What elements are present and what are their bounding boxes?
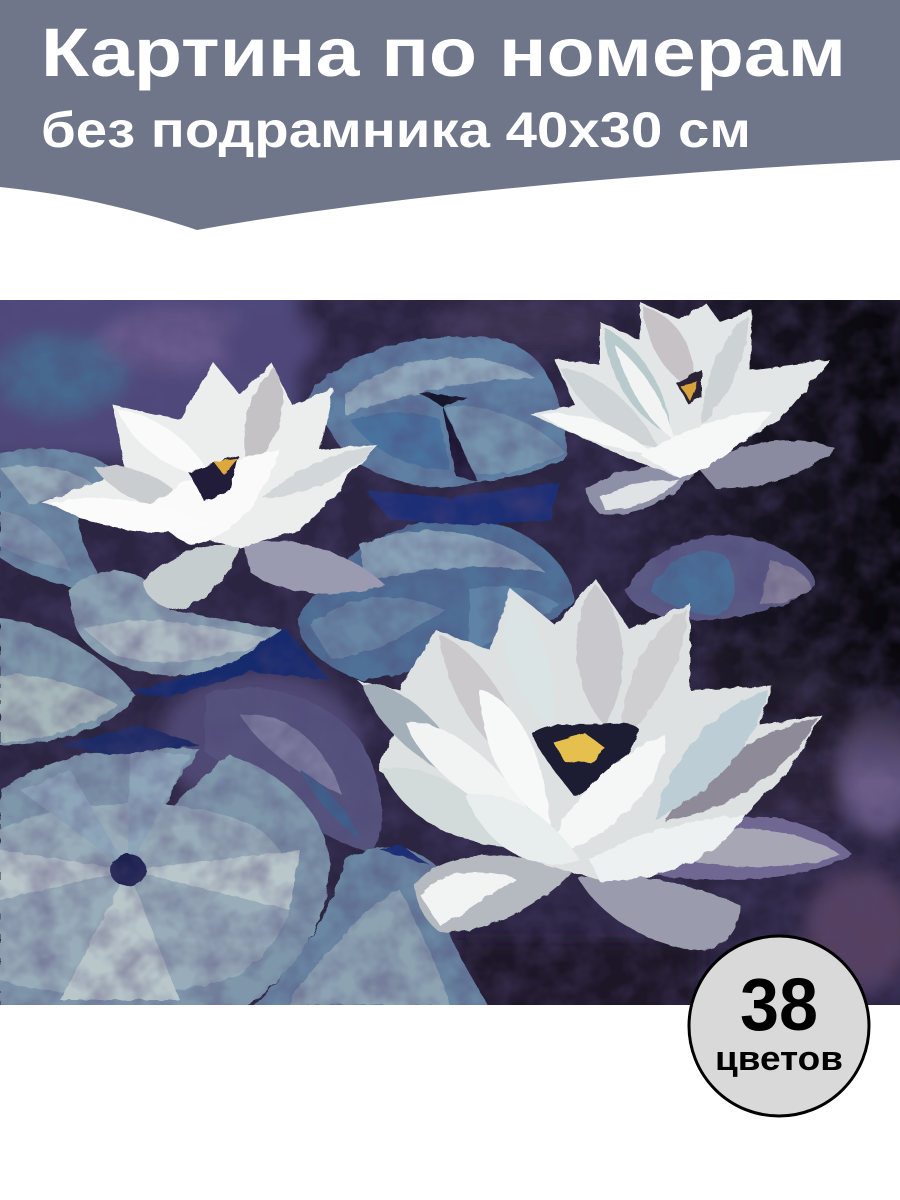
painting: water lilies: [0, 280, 900, 1030]
outer petals: [362, 684, 440, 769]
badge label: цветов: [715, 1040, 843, 1078]
pad: large bottom left: [0, 746, 330, 1010]
silhouette: [357, 578, 822, 880]
silhouette: [42, 362, 378, 548]
pad: left lower: [0, 618, 135, 745]
flower: top right: [530, 302, 835, 515]
background tones: [0, 280, 900, 1030]
mottled paint overlay: [0, 300, 900, 1005]
sepals: [243, 541, 385, 594]
pad: right dark: [625, 535, 815, 620]
sepals: [700, 440, 835, 488]
centre: [532, 723, 638, 797]
lily pads: [0, 336, 815, 1010]
subtitle: без подрамника 40х30 см: [41, 102, 751, 158]
centre: [676, 370, 702, 404]
centre: [188, 455, 238, 502]
pad: middle: [298, 518, 574, 680]
title: Картина по номерам: [41, 14, 846, 91]
dark right edge: [636, 300, 900, 770]
petals: [94, 464, 174, 504]
flower: bottom centre: [357, 578, 853, 950]
sepals: [415, 855, 575, 932]
pad: top centre: [305, 336, 568, 488]
silhouette: [530, 302, 830, 478]
pad: purple centre: [205, 688, 382, 852]
water: deep blue: [365, 482, 560, 525]
badge number: 38: [740, 963, 818, 1046]
pad: bottom middle: [250, 848, 490, 1010]
badge: 38 colours: [689, 936, 869, 1116]
pad: left centre: [68, 571, 285, 676]
inner petals: [480, 690, 550, 825]
flower: left: [42, 362, 385, 610]
pad: left upper: [0, 448, 128, 592]
header banner: [0, 0, 900, 230]
petals: [560, 368, 660, 450]
